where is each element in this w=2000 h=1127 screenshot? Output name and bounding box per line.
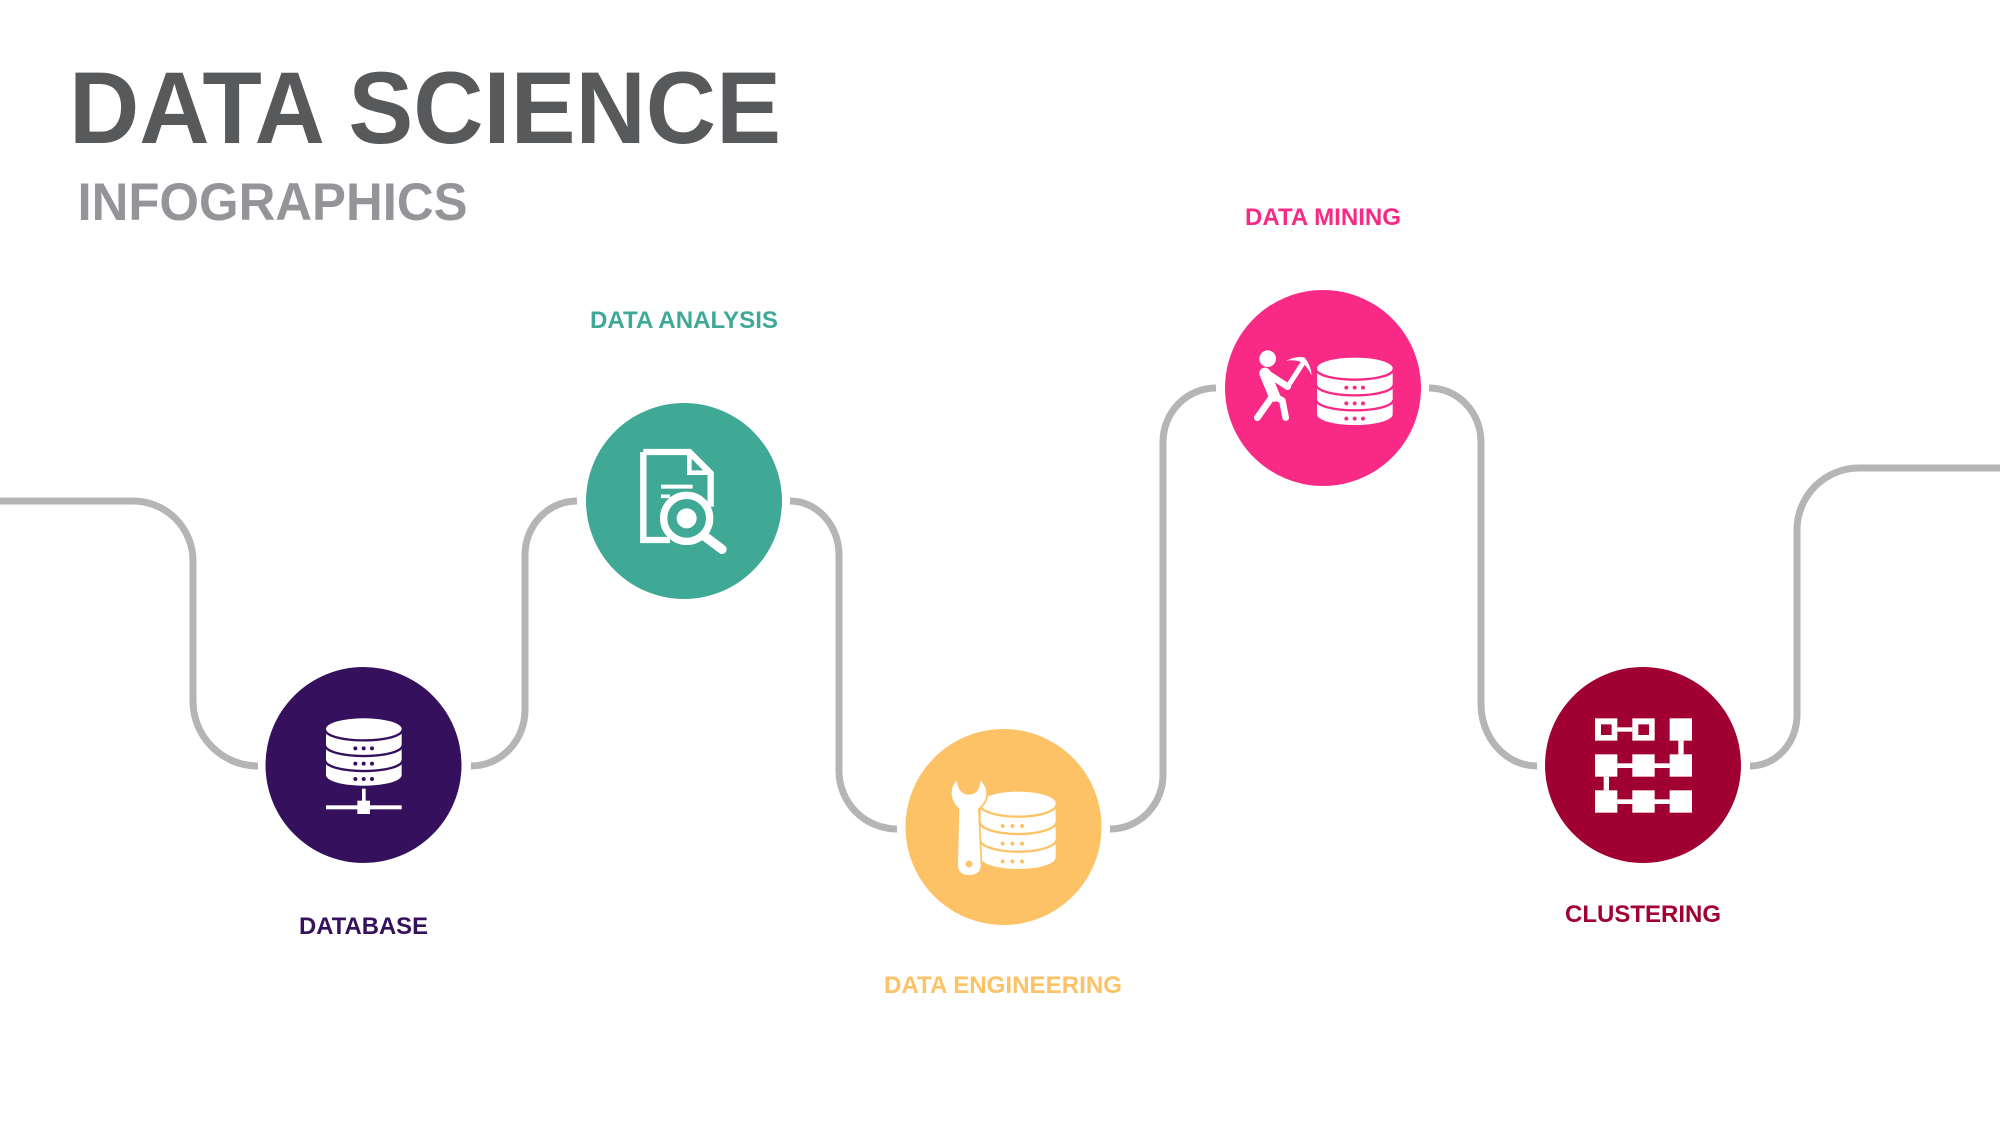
step 1: database [266,667,462,940]
circle: clustering [1545,667,1741,863]
step 2: data analysis [586,307,782,599]
label: data mining: DATA MINING [1245,204,1401,231]
subtitle: INFOGRAPHICS [78,173,468,232]
title: DATA SCIENCE [69,51,781,165]
circle: data analysis [586,403,782,599]
icon: database server with network [325,718,402,814]
circle: data engineering [906,729,1102,925]
step 5: clustering [1545,667,1741,928]
circle: database [266,667,462,863]
circle: data mining [1225,290,1421,486]
label: data analysis: DATA ANALYSIS [590,307,778,334]
icon: cluster nodes [1595,718,1692,813]
icon: wrench and database [952,781,1056,875]
connector path [0,388,2000,829]
step 3: data engineering [884,729,1122,999]
step 4: data mining [1225,204,1421,486]
icon: miner and database [1257,350,1393,425]
label: clustering: CLUSTERING [1565,901,1721,928]
icon: document with magnifier [643,452,722,549]
label: database: DATABASE [299,913,428,940]
label: data engineering: DATA ENGINEERING [884,972,1122,999]
